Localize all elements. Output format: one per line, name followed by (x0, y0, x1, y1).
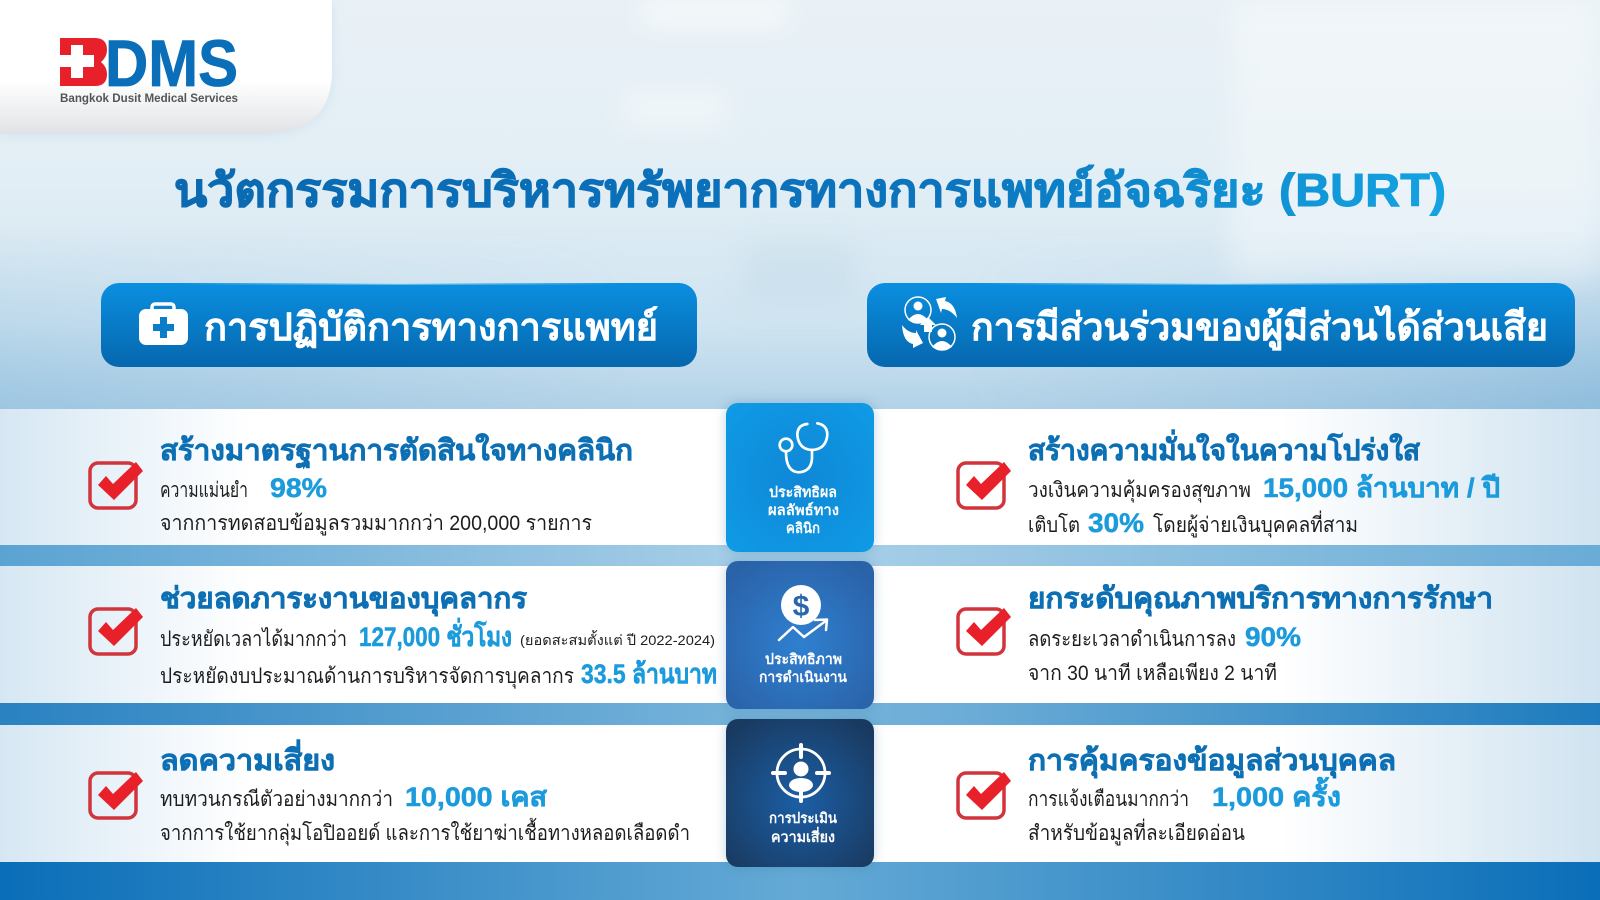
card: clinical outcome effectiveness: ประสิทธิผล (769, 484, 837, 501)
icon: red check (958, 772, 1011, 818)
panel: transparency row 1 right: เติบโต (1028, 513, 1080, 537)
panel: workload row 2 left: 127,000 ชั่วโมง (359, 617, 512, 652)
card: clinical outcome effectiveness (726, 403, 874, 552)
panel: transparency row 1 right: สร้างความมั่นใจในความโปร่งใส (1028, 429, 1420, 467)
card: operational efficiency (726, 561, 874, 709)
panel: data protection row 3 right (958, 745, 1396, 846)
panel: transparency row 1 right: 30% (1088, 508, 1144, 538)
icon: dollar growth: $ (793, 590, 810, 623)
panel: risk row 3 left: จากการใช้ยากลุ่มโอปิออยด์ และการใช้ยาฆ่าเชื้อทางหลอดเลือดดำ (160, 818, 690, 846)
row backgrounds (0, 409, 1600, 862)
logo: BDMS mark: DMS (105, 26, 238, 100)
panel: service quality row 2 right (958, 583, 1493, 685)
logo panel (0, 0, 332, 134)
heading button: stakeholder engagement: การมีส่วนร่วมของผู้มีส่วนได้ส่วนเสีย (971, 305, 1548, 351)
panel: risk row 3 left (90, 739, 690, 846)
icon: stakeholders exchange (902, 297, 957, 350)
panel: service quality row 2 right: ยกระดับคุณภาพบริการทางการรักษา (1028, 583, 1493, 616)
icon: stethoscope (780, 423, 827, 472)
card: clinical outcome effectiveness: คลินิก (786, 520, 820, 537)
lower bands (0, 545, 1600, 900)
panel: clinical row 1 left: สร้างมาตรฐานการตัดสินใจทางคลินิก (160, 433, 633, 469)
icon: dollar growth (779, 585, 827, 640)
title: นวัตกรรมการบริหารทรัพยากรทางการแพทย์อัจฉริยะ (BURT) (174, 164, 1446, 216)
panel: service quality row 2 right: ลดระยะเวลาดำเนินการลง (1028, 628, 1236, 651)
panel: transparency row 1 right: โดยผู้จ่ายเงินบุคคลที่สาม (1153, 510, 1358, 538)
icon: medical bag (139, 304, 188, 345)
icon: red check (90, 608, 143, 654)
logo: BDMS mark (60, 26, 238, 105)
panel: clinical row 1 left: 98% (270, 473, 327, 503)
panel: data protection row 3 right: สำหรับข้อมูลที่ละเอียดอ่อน (1028, 818, 1245, 846)
card: clinical outcome effectiveness: ผลลัพธ์ทาง (768, 501, 839, 519)
card: risk assessment: ความเสี่ยง (771, 826, 835, 846)
icon: target person (773, 745, 829, 801)
panel: transparency row 1 right: 15,000 ล้านบาท / ปี (1263, 473, 1500, 503)
background: blurred hospital corridor (0, 0, 1600, 409)
icon: red check (90, 772, 143, 818)
panel: service quality row 2 right: 90% (1245, 622, 1301, 652)
card: risk assessment (726, 719, 874, 867)
panel: clinical row 1 left: ความแม่นยำ (160, 479, 248, 502)
heading button: medical operations: การปฏิบัติการทางการแพทย์ (204, 306, 658, 349)
panel: data protection row 3 right: 1,000 ครั้ง (1212, 776, 1341, 812)
panel: workload row 2 left (90, 583, 717, 689)
panel: transparency row 1 right (958, 429, 1500, 538)
panel: data protection row 3 right: การแจ้งเตือนมากกว่า (1028, 788, 1189, 811)
card: operational efficiency: การดำเนินงาน (759, 669, 847, 686)
panel: data protection row 3 right: การคุ้มครองข้อมูลส่วนบุคคล (1028, 745, 1396, 778)
panel: risk row 3 left: 10,000 เคส (405, 782, 548, 812)
logo: BDMS mark: Bangkok Dusit Medical Services (60, 91, 238, 105)
panel: workload row 2 left: ประหยัดเวลาได้มากกว่า (160, 627, 347, 651)
panel: transparency row 1 right: วงเงินความคุ้มครองสุขภาพ (1028, 479, 1251, 503)
panel: clinical row 1 left (90, 433, 633, 536)
heading button: medical operations (101, 283, 697, 367)
panel: workload row 2 left: 33.5 ล้านบาท (581, 659, 717, 689)
panel: workload row 2 left: ประหยัดงบประมาณด้านการบริหารจัดการบุคลากร (160, 665, 574, 689)
icon: red check (958, 462, 1011, 508)
icon: red check (90, 462, 143, 508)
panel: risk row 3 left: ทบทวนกรณีตัวอย่างมากกว่า (160, 788, 393, 811)
card: operational efficiency: ประสิทธิภาพ (765, 651, 842, 668)
panel: workload row 2 left: ช่วยลดภาระงานของบุคลากร (160, 583, 527, 616)
panel: service quality row 2 right: จาก 30 นาที เหลือเพียง 2 นาที (1028, 662, 1277, 685)
icon: red check (958, 608, 1011, 654)
panel: workload row 2 left: (ยอดสะสมตั้งแต่ ปี 2022-2024) (520, 630, 715, 648)
panel: risk row 3 left: ลดความเสี่ยง (160, 739, 335, 777)
heading button: stakeholder engagement (867, 283, 1575, 367)
card: risk assessment: การประเมิน (769, 810, 837, 827)
panel: clinical row 1 left: จากการทดสอบข้อมูลรวมมากกว่า 200,000 รายการ (160, 512, 592, 536)
